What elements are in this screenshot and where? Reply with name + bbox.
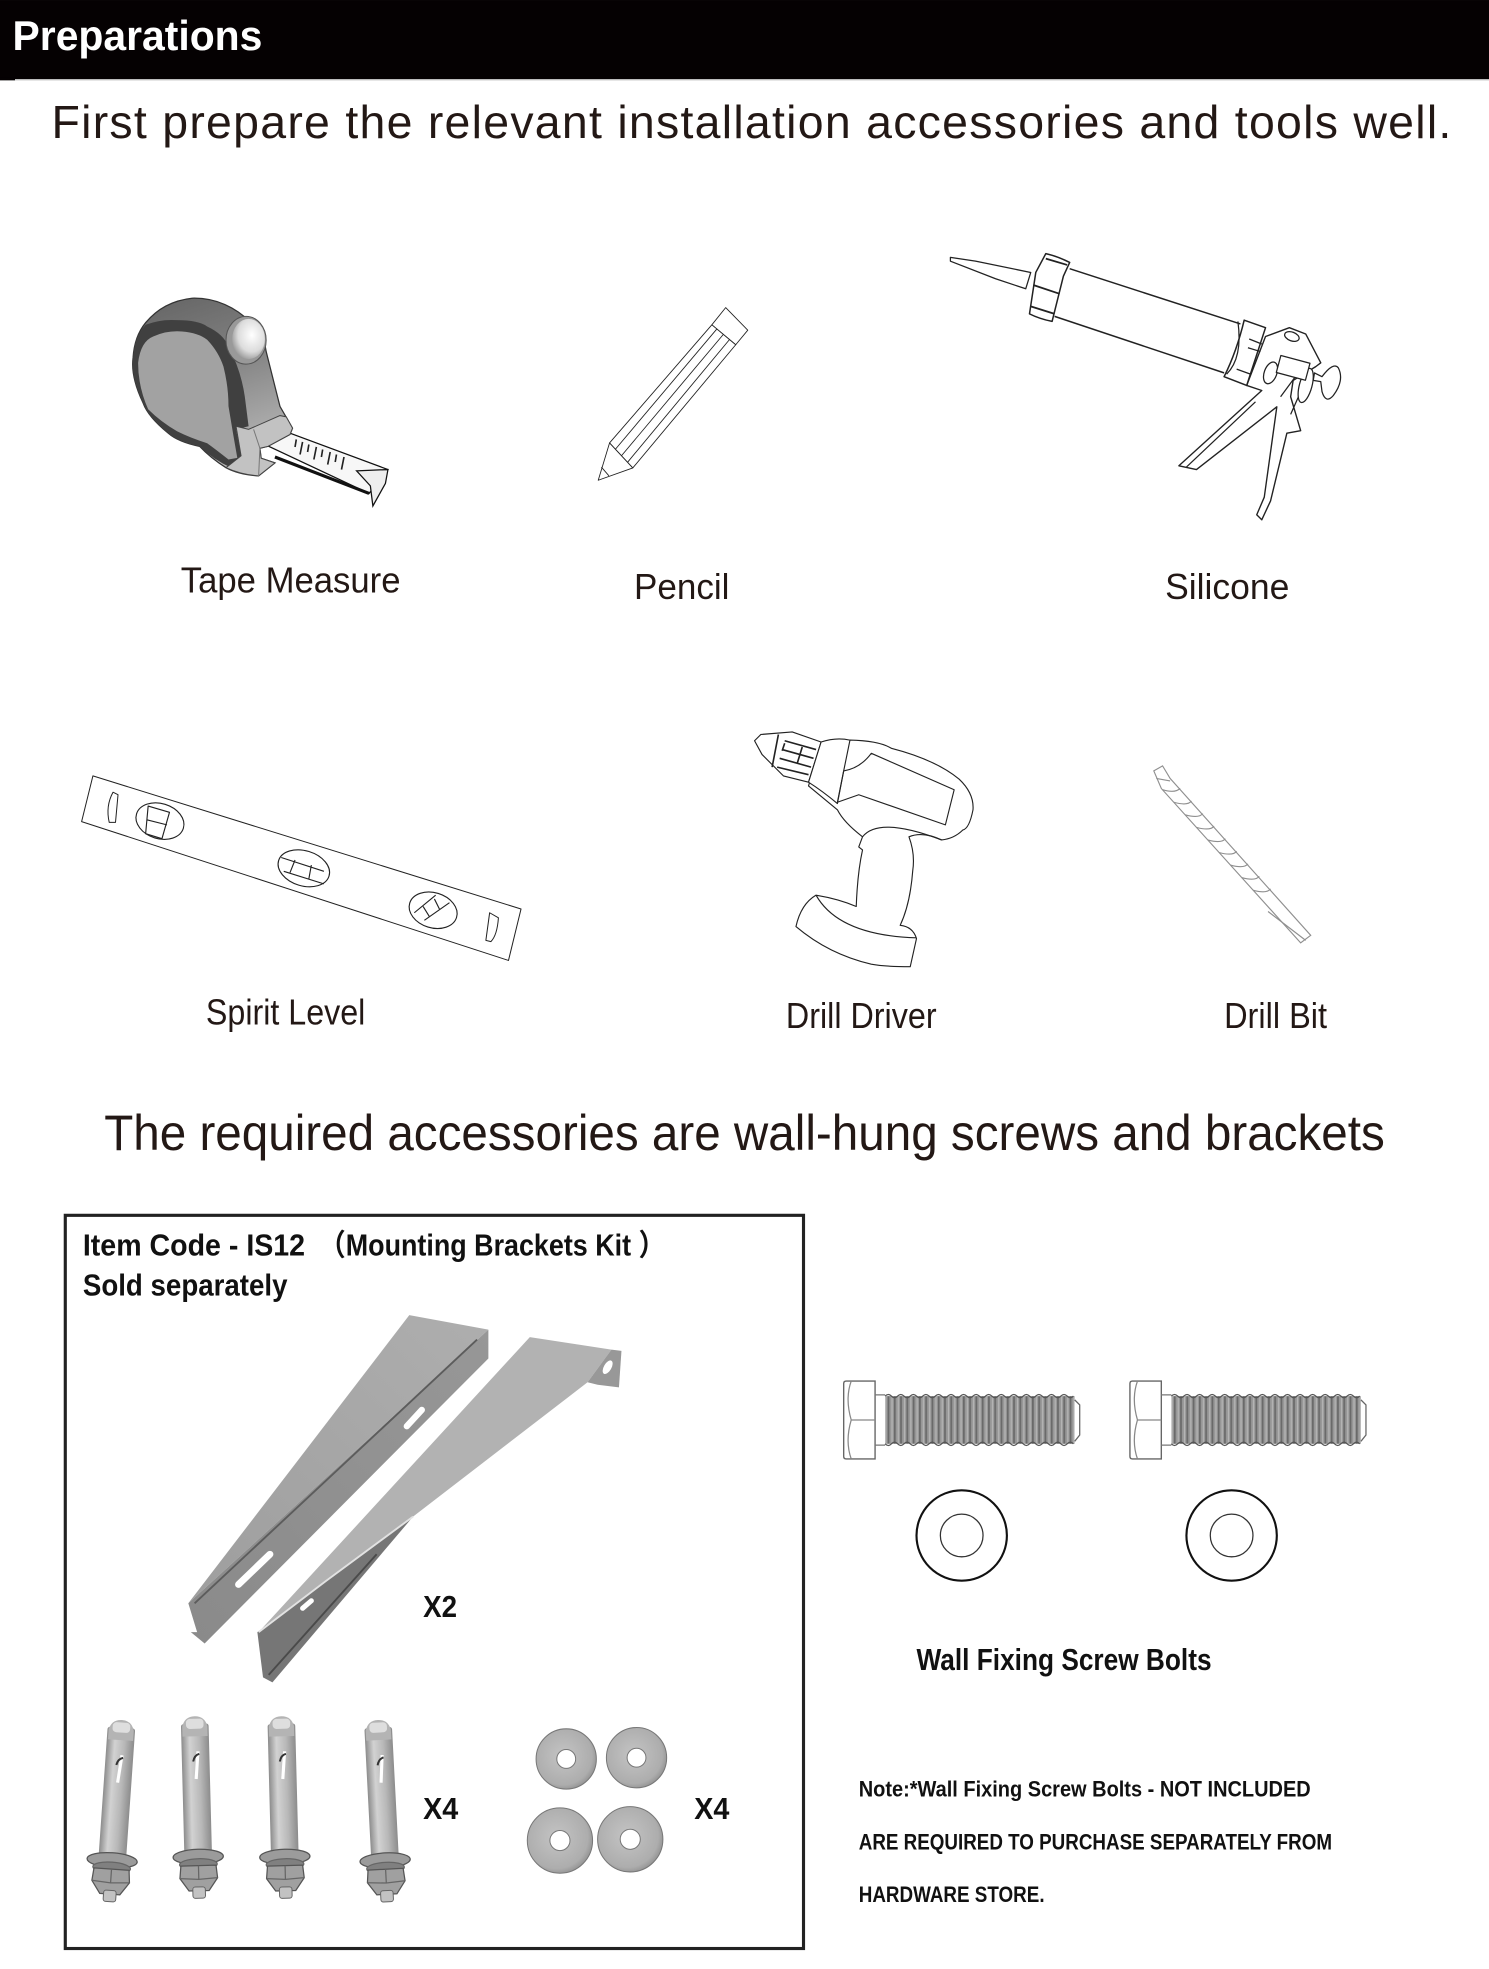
note text block: Note:*Wall Fixing Screw Bolts - NOT INCLUDED	[859, 1777, 1311, 1802]
photo: back bracket	[188, 1315, 488, 1643]
tool: drill bit	[1154, 766, 1311, 943]
kit title: （Mounting Brackets Kit ）	[319, 1229, 665, 1262]
label: Pencil: Pencil	[634, 566, 729, 607]
label: Tape Measure: Tape Measure	[181, 560, 400, 601]
label: X4 bolts: X4	[423, 1793, 458, 1826]
header bar	[0, 0, 1489, 80]
wall fixing screw bolts	[844, 1381, 1366, 1581]
heading: Preparations: Preparations	[13, 12, 262, 59]
photo: expansion bolts	[84, 1716, 412, 1903]
label: Wall Fixing Screw Bolts: Wall Fixing Screw Bolts	[917, 1644, 1212, 1677]
photo: front bracket	[257, 1337, 621, 1682]
kit title	[83, 1229, 665, 1303]
label: Drill Driver: Drill Driver	[786, 995, 937, 1036]
note text block: HARDWARE STORE.	[859, 1882, 1045, 1907]
label: Spirit Level: Spirit Level	[206, 991, 365, 1032]
housing	[226, 416, 293, 476]
tool: silicone gun	[950, 254, 1341, 520]
label: Silicone: Silicone	[1165, 566, 1289, 607]
tool: drill driver	[755, 732, 973, 967]
lock button	[226, 316, 266, 364]
section heading: The required accessories are wall-hung screws and brackets	[104, 1105, 1385, 1161]
tool: pencil	[598, 308, 748, 480]
photo: washers	[527, 1728, 667, 1873]
note text block: ARE REQUIRED TO PURCHASE SEPARATELY FROM	[859, 1829, 1332, 1854]
label: X4 washers: X4	[694, 1793, 730, 1826]
kit title: Sold separately	[83, 1270, 288, 1303]
tape case	[133, 298, 293, 476]
panel: mounting brackets kit	[65, 1215, 804, 1949]
label: X2: X2	[423, 1591, 457, 1624]
tool: spirit level	[82, 776, 521, 960]
intro sentence: First prepare the relevant installation accessories and tools well.	[51, 96, 1451, 148]
dial face	[138, 331, 237, 460]
grip band	[133, 320, 249, 468]
kit title: Item Code - IS12	[83, 1229, 305, 1262]
tape blade	[267, 433, 388, 506]
tool: tape measure	[133, 298, 388, 506]
label: Drill Bit: Drill Bit	[1224, 995, 1327, 1036]
note text block	[859, 1777, 1332, 1907]
